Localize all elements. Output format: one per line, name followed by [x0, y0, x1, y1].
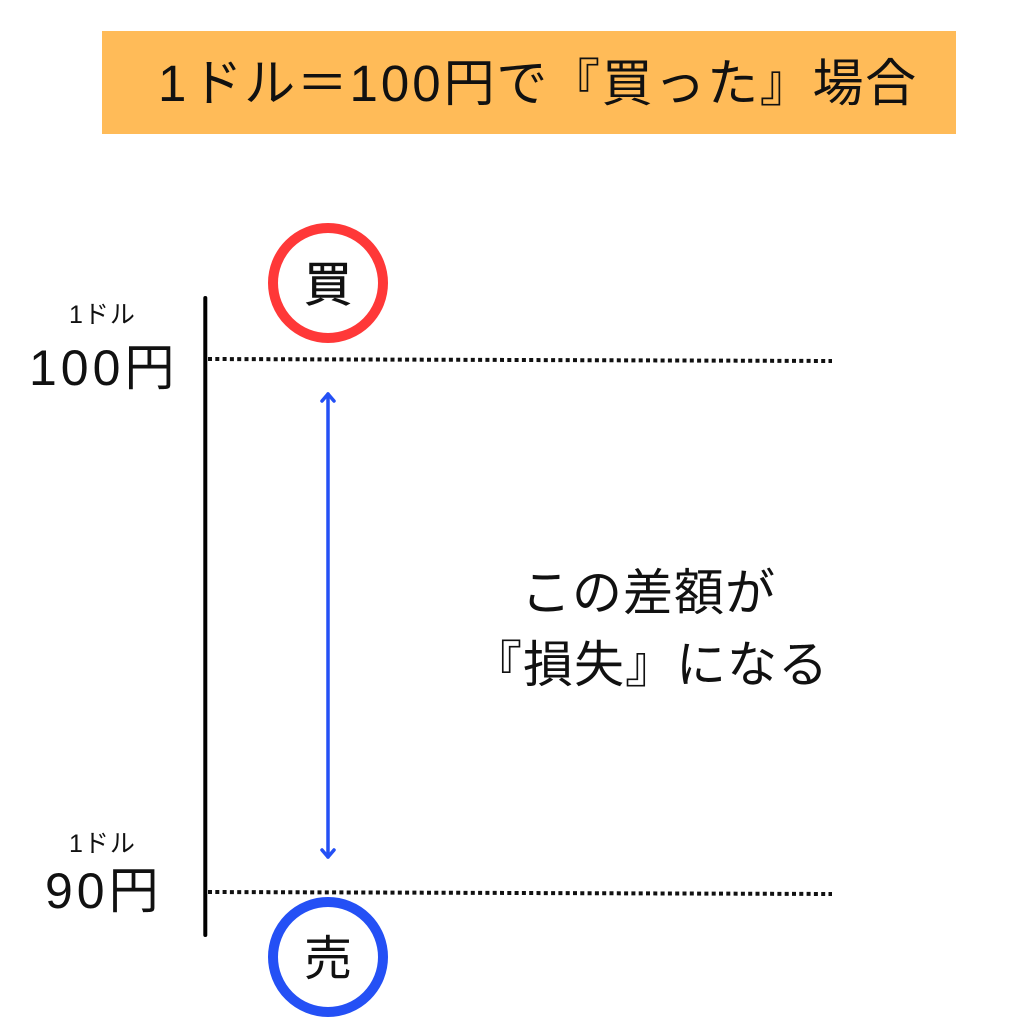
sell marker circle	[273, 902, 383, 1012]
label: per dollar, bottom: 1ドル	[69, 830, 136, 858]
buy marker circle	[273, 228, 383, 338]
buy label: 買	[304, 259, 352, 312]
explanation line 1: この差額が	[521, 565, 776, 621]
explanation text	[472, 565, 829, 693]
explanation line 2: 『損失』になる	[472, 637, 829, 693]
title text: 1ドル＝100円で『買った』場合	[158, 55, 918, 112]
label: 90 yen: 90円	[45, 863, 159, 919]
label: per dollar, top: 1ドル	[69, 301, 136, 329]
label: 100 yen: 100円	[29, 340, 174, 396]
dotted line at 90 yen	[208, 892, 832, 894]
double-headed blue arrow	[322, 394, 334, 857]
vertical price axis	[203, 298, 207, 935]
title banner	[102, 31, 956, 134]
dotted line at 100 yen	[208, 359, 832, 361]
sell label: 売	[304, 933, 352, 986]
